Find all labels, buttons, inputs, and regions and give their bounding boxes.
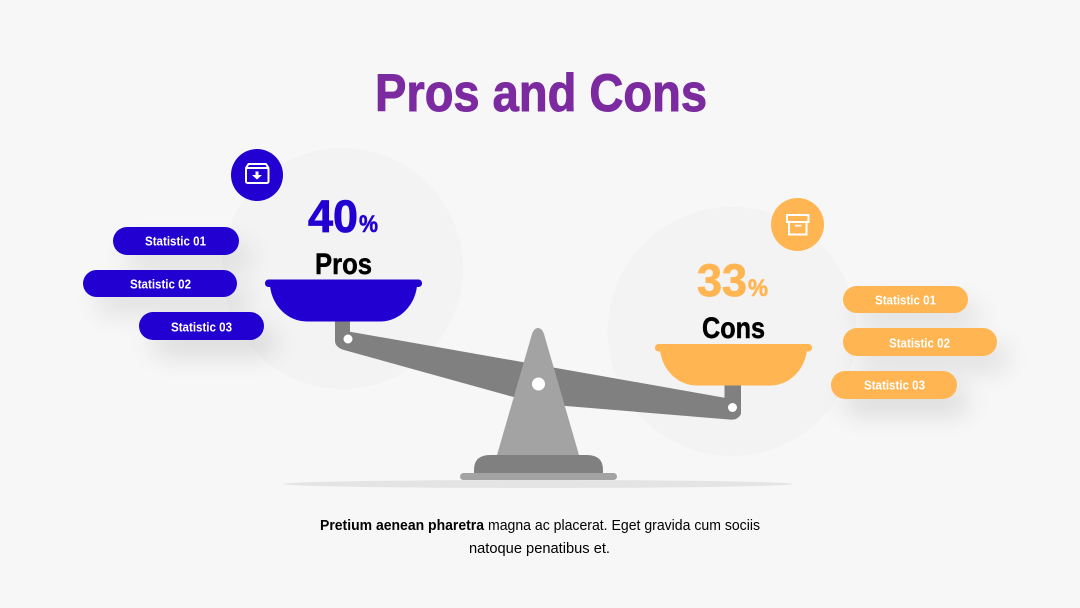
- cons label: Cons: [702, 312, 765, 345]
- title: Pros and Cons: [375, 64, 707, 123]
- cons pan: [655, 344, 812, 386]
- scale foot: [460, 473, 617, 480]
- pill: cons statistic 03: [831, 371, 957, 399]
- panel: cons background circle: [608, 207, 856, 456]
- pros label: Pros: [315, 248, 372, 281]
- description text: natoque penatibus et.: [469, 541, 610, 557]
- icon: archive box: [771, 198, 824, 251]
- scale post: [497, 328, 579, 455]
- scale beam: [335, 316, 741, 420]
- cons value: %: [748, 275, 768, 302]
- pill: cons statistic 02: [843, 328, 997, 356]
- pill: pros statistic 01: [113, 227, 239, 255]
- pill: cons statistic 03: Statistic 03: [864, 378, 925, 392]
- pill: cons statistic 01: Statistic 01: [875, 294, 936, 308]
- ground shadow: [283, 480, 793, 488]
- description text: Pretium aenean pharetra: [320, 518, 485, 534]
- cons statistics pills: [831, 286, 1009, 415]
- pill: pros statistic 03: Statistic 03: [171, 320, 232, 334]
- right pin: [728, 403, 737, 412]
- pros value: %: [359, 211, 378, 238]
- balance scale: [335, 316, 741, 480]
- description text: [320, 518, 760, 557]
- description text: magna ac placerat. Eget gravida cum sociis: [488, 518, 760, 534]
- pros statistics pills: [83, 227, 276, 356]
- pill: pros statistic 03: [139, 312, 264, 340]
- icon: archive download: [231, 149, 283, 201]
- pill: pros statistic 01: Statistic 01: [145, 234, 206, 248]
- left pin: [344, 334, 352, 344]
- pros value: 40: [308, 191, 358, 242]
- pivot: [532, 378, 545, 390]
- cons value: 33: [697, 255, 747, 306]
- scale base: [474, 455, 603, 473]
- pros pan: [265, 280, 422, 322]
- pill: pros statistic 02: Statistic 02: [130, 278, 191, 292]
- pill: cons statistic 01: [843, 286, 968, 313]
- pill: cons statistic 02: Statistic 02: [889, 336, 950, 350]
- panel: pros background circle: [222, 148, 463, 389]
- pill: pros statistic 02: [83, 270, 237, 297]
